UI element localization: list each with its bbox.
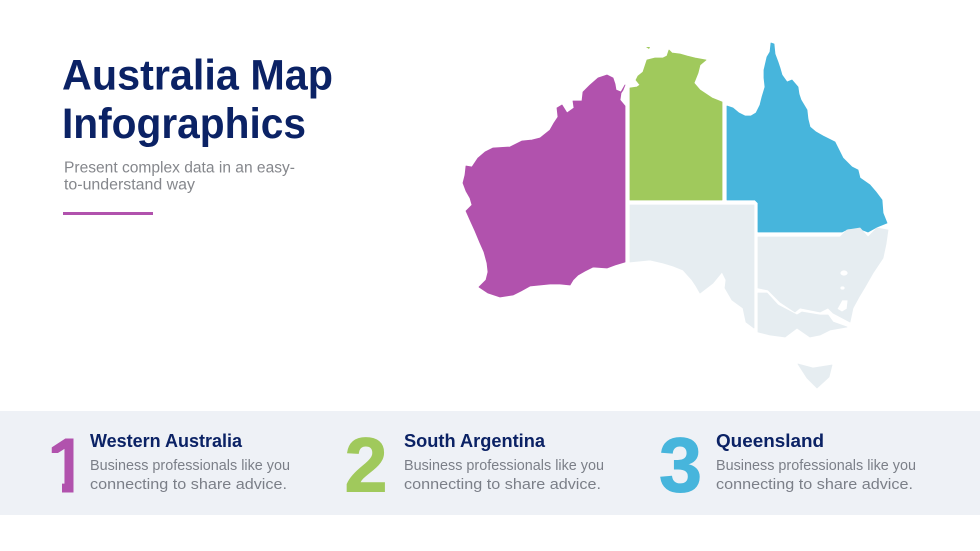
title bbox=[62, 52, 333, 148]
number 2: 2 bbox=[344, 422, 388, 508]
accent line bbox=[63, 212, 153, 215]
description: Business professionals like you bbox=[404, 457, 604, 474]
subtitle: Present complex data in an easy- bbox=[64, 160, 295, 176]
region: South Australia bbox=[630, 205, 754, 328]
description bbox=[90, 457, 290, 493]
item 2: South Argentina bbox=[344, 422, 604, 508]
bottom band bbox=[0, 411, 980, 515]
item 3: Queensland bbox=[659, 422, 916, 508]
heading: South Argentina bbox=[404, 431, 546, 451]
subtitle bbox=[64, 160, 295, 194]
region: Northern Territory bbox=[630, 50, 722, 200]
number 1: 1 bbox=[47, 423, 90, 509]
heading: Queensland bbox=[716, 431, 824, 451]
subtitle: to-understand way bbox=[64, 176, 195, 194]
description: connecting to share advice. bbox=[404, 476, 601, 493]
region: Victoria bbox=[758, 293, 847, 337]
map of Australia bbox=[463, 43, 888, 388]
description: Business professionals like you bbox=[716, 457, 916, 474]
description: connecting to share advice. bbox=[716, 476, 913, 493]
description: connecting to share advice. bbox=[90, 476, 287, 493]
region: Tasmania bbox=[798, 364, 832, 388]
description: Business professionals like you bbox=[90, 457, 290, 474]
title: Australia Map bbox=[62, 52, 333, 100]
item 1: Western Australia bbox=[44, 423, 290, 509]
description bbox=[716, 457, 916, 493]
heading: Western Australia bbox=[90, 431, 243, 451]
island bbox=[646, 47, 650, 49]
region: Queensland bbox=[727, 43, 887, 232]
title: Infographics bbox=[62, 100, 306, 148]
description bbox=[404, 457, 604, 493]
region: Western Australia bbox=[463, 75, 625, 297]
number 3: 3 bbox=[659, 422, 702, 508]
region: New South Wales bbox=[758, 228, 888, 322]
